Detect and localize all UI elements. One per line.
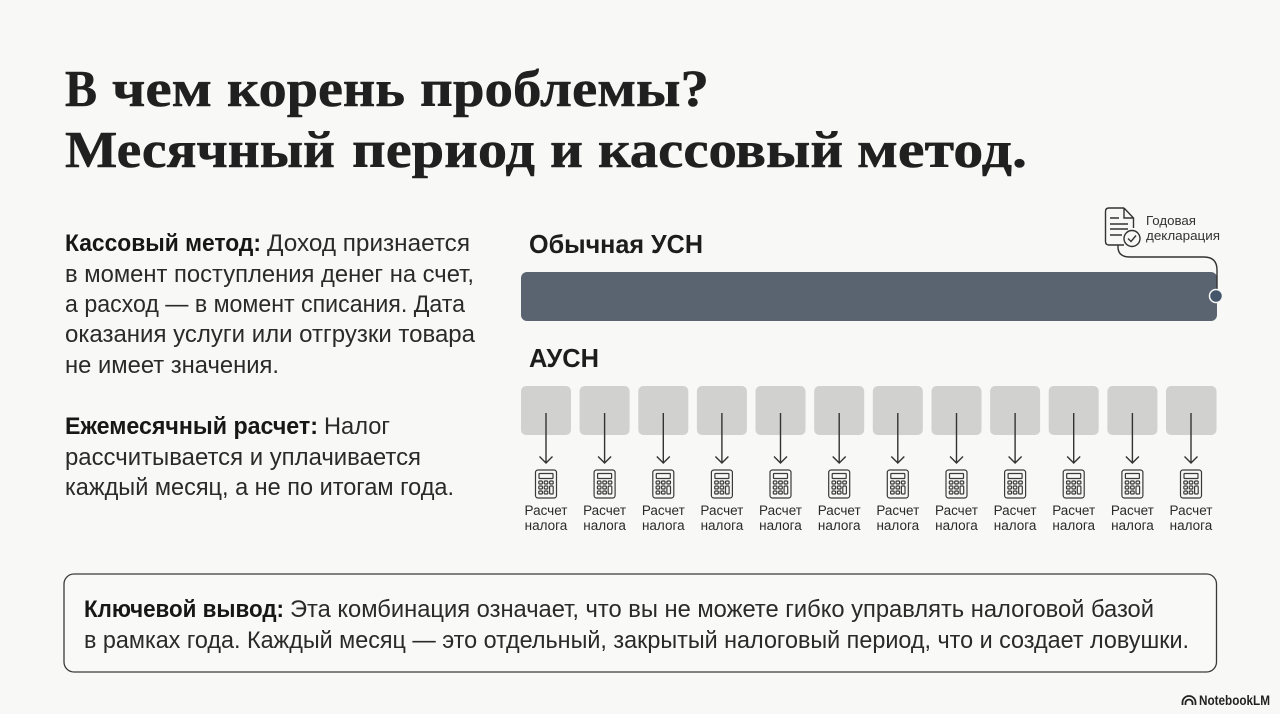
month 7: Расчет [876,503,919,518]
month 10: Расчет [1052,503,1095,518]
title: В [65,61,97,118]
month 6: Расчет [818,503,861,518]
heading: AUSN: АУСН [529,343,599,373]
month 8 [932,386,982,533]
month 7 [873,386,923,533]
month 5 [756,386,806,533]
month 3: Расчет [642,503,685,518]
label: annual declaration: декларация [1146,228,1220,243]
title: Месячный [65,122,335,179]
month 3: налога [642,518,685,533]
text block: cash method: а расход — в момент списания. Дата [65,291,466,318]
month 5: Расчет [759,503,802,518]
callout: key takeaway: Ключевой вывод: [84,596,284,623]
text block: cash method: Кассовый метод: [65,230,261,257]
month 4 [697,386,747,533]
monthly columns [521,386,1216,533]
title: корень [227,61,405,118]
annual bar [521,272,1217,321]
label: annual declaration [1146,213,1220,243]
text block: cash method: Доход признается [267,230,470,257]
text block: cash method: в момент поступления денег на счет, [65,261,474,288]
month 12 [1166,386,1216,533]
month 1: налога [525,518,568,533]
text block: cash method [65,230,476,379]
text block: monthly calculation: каждый месяц, а не по итогам года. [65,474,454,501]
month 9 [990,386,1040,533]
month 2 [580,386,630,533]
month 9: Расчет [994,503,1037,518]
month 11 [1107,386,1157,533]
title [65,61,1027,179]
month 8: Расчет [935,503,978,518]
month 10: налога [1052,518,1096,533]
month 2: Расчет [583,503,626,518]
month 8: налога [935,518,978,533]
label: annual declaration: Годовая [1146,213,1196,228]
month 11: Расчет [1111,503,1154,518]
text block: monthly calculation [65,413,454,501]
month 10 [1049,386,1099,533]
heading: regular USN: Обычная УСН [529,229,703,259]
title: метод. [857,122,1027,179]
text block: monthly calculation: рассчитывается и уплачивается [65,444,421,471]
title: проблемы? [420,61,709,118]
month 6: налога [818,518,861,533]
connector: bar to declaration [1118,245,1217,296]
title: период [352,122,535,179]
month 11: налога [1111,518,1154,533]
text block: cash method: не имеет значения. [65,352,279,379]
month 1: Расчет [525,503,567,518]
month 12: налога [1170,518,1213,533]
callout: key takeaway: Эта комбинация означает, что вы не можете гибко управлять налоговой базой [290,596,1154,623]
month 2: налога [583,518,626,533]
month 5: налога [759,518,802,533]
month 4: налога [701,518,744,533]
text block: monthly calculation: Ежемесячный расчет: [65,413,318,440]
title: чем [112,61,212,118]
callout: key takeaway [64,574,1216,672]
title: и [550,122,583,179]
callout: key takeaway: в рамках года. Каждый месяц — это отдельный, закрытый налоговый период, что и создает ловушки. [84,627,1189,654]
icon: declaration document [1106,208,1140,246]
month 6 [814,386,864,533]
marker: year end [1210,290,1222,302]
month 12: Расчет [1170,503,1212,518]
month 4: Расчет [700,503,743,518]
month 7: налога [876,518,920,533]
month 1 [521,386,571,533]
logo: NotebookLM: NotebookLM [1199,693,1270,708]
month 3 [638,386,688,533]
title: кассовый [598,122,843,179]
text block: monthly calculation: Налог [324,413,390,440]
text block: cash method: оказания услуги или отгрузки товара [65,321,476,348]
month 9: налога [994,518,1037,533]
